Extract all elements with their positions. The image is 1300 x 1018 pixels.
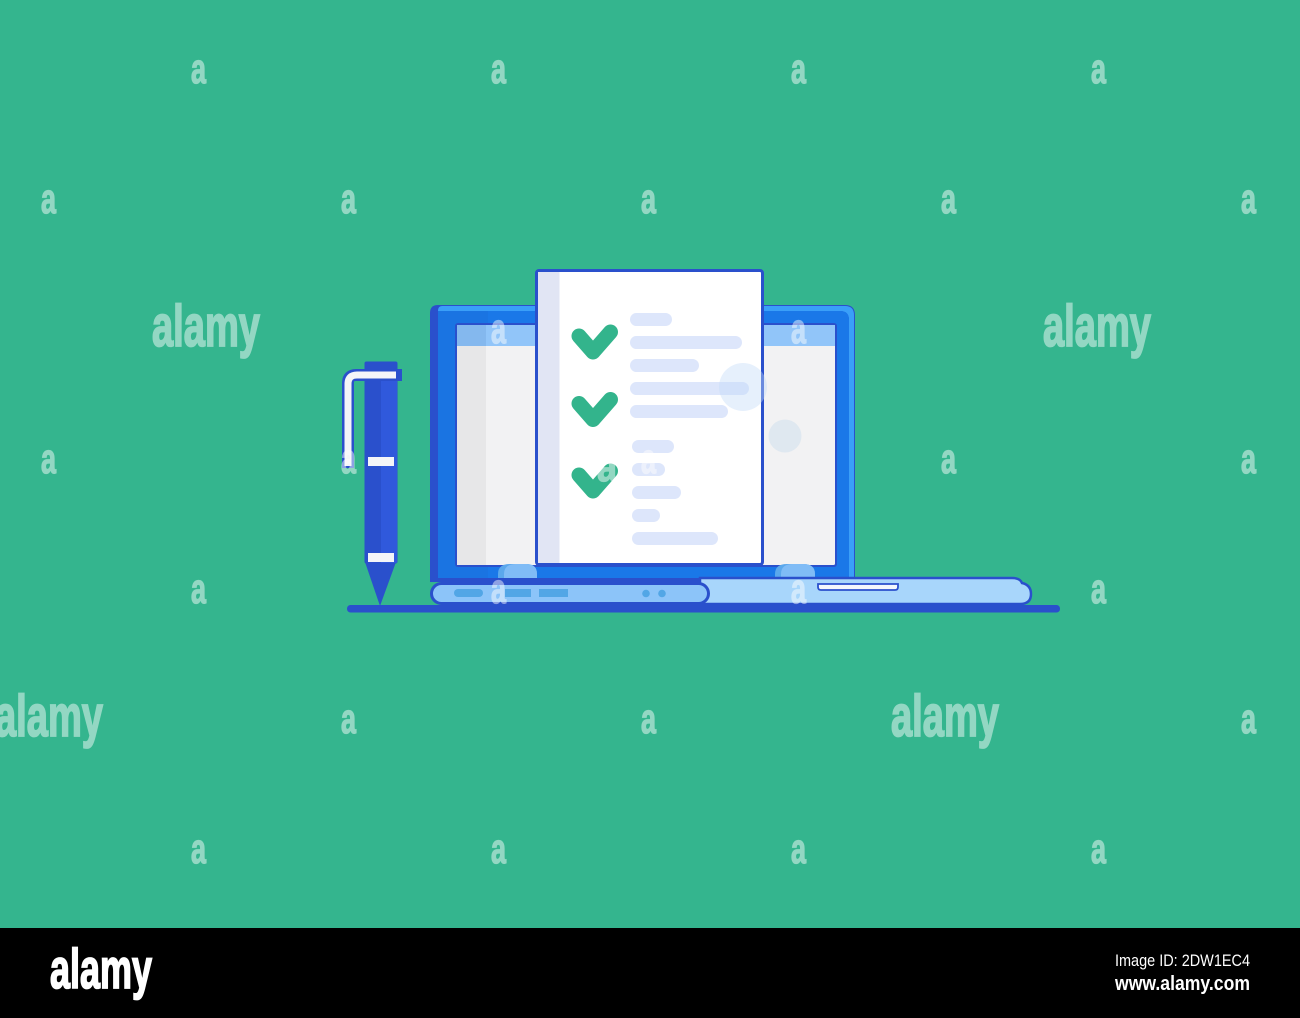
check mark 3: [579, 471, 610, 491]
ground line: [347, 605, 1060, 612]
small watermarks: a: [641, 175, 656, 222]
pen clip: [348, 375, 398, 468]
small watermarks: a: [941, 435, 956, 482]
small watermarks: a: [1241, 695, 1256, 742]
small watermarks: a: [791, 305, 806, 352]
small watermarks: a: [1091, 565, 1106, 612]
paper side strip: [538, 272, 560, 563]
small watermarks: a: [791, 565, 806, 612]
small watermarks: a: [341, 695, 356, 742]
hinge left: [498, 564, 537, 578]
trackpad notch: [818, 584, 898, 590]
text bars group 2: [630, 382, 749, 418]
small watermarks: a: [791, 45, 806, 92]
laptop screen: [430, 305, 855, 582]
website: www.alamy.com: [1114, 973, 1250, 995]
small watermarks: a: [597, 443, 618, 490]
window title bar: [457, 325, 835, 346]
check mark 1: [579, 332, 610, 352]
pen tip: [365, 562, 396, 606]
translucent circle: [719, 363, 767, 411]
pen bands: [368, 457, 394, 466]
small watermarks: a: [491, 305, 506, 352]
small watermarks: a: [1091, 45, 1106, 92]
image id: Image ID: 2DW1EC4: [1115, 951, 1250, 970]
small watermarks: a: [1091, 825, 1106, 872]
laptop base: [432, 578, 1031, 604]
document checklist: [536, 270, 767, 564]
large watermarks: alamy: [152, 294, 260, 359]
small watermarks: a: [491, 45, 506, 92]
circle on display: [768, 420, 802, 452]
small watermarks: a: [191, 565, 206, 612]
large watermarks: alamy: [891, 684, 999, 749]
small watermarks: a: [491, 825, 506, 872]
small watermarks: a: [641, 695, 656, 742]
small watermarks: a: [341, 175, 356, 222]
screen lid: [430, 305, 855, 582]
small watermarks: a: [941, 175, 956, 222]
small watermarks: a: [1241, 435, 1256, 482]
small watermarks: a: [41, 175, 56, 222]
hinge right: [775, 564, 815, 578]
small watermarks: a: [191, 45, 206, 92]
base front: [432, 584, 708, 604]
paper: [536, 270, 762, 564]
large watermarks: [0, 294, 1151, 749]
small watermarks: a: [491, 565, 506, 612]
text bars group 3: [632, 440, 718, 545]
pen barrel: [364, 362, 398, 564]
base rear: [700, 578, 1031, 604]
small watermarks: a: [191, 825, 206, 872]
text bars group 1: [630, 313, 742, 372]
ports: [454, 589, 666, 597]
small watermarks: [41, 45, 1256, 872]
small watermarks: a: [641, 435, 656, 482]
footer bar: [0, 928, 1300, 1018]
small watermarks: a: [791, 825, 806, 872]
small watermarks: a: [1241, 175, 1256, 222]
large watermarks: alamy: [1043, 294, 1151, 359]
icon: pen: [348, 362, 402, 606]
small watermarks: a: [41, 435, 56, 482]
small watermarks: a: [341, 435, 356, 482]
check mark 2: [579, 400, 610, 420]
footer logo: alamy: [50, 937, 152, 1000]
display: [455, 323, 837, 567]
